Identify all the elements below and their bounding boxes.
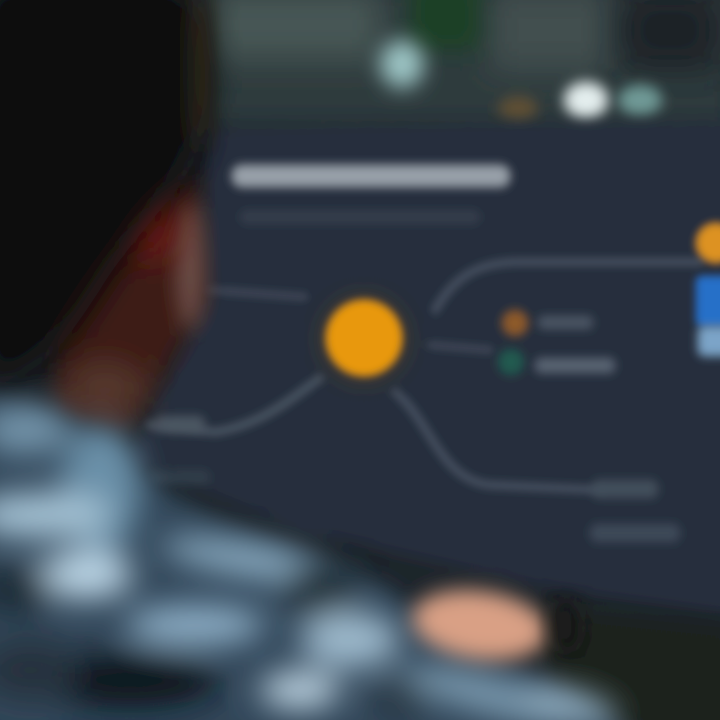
- person: neck and ear: [50, 170, 205, 430]
- heading: blurred screen title: [232, 165, 510, 224]
- person: patterned shirt: [0, 395, 640, 720]
- person: hand: [408, 582, 579, 668]
- icon: right edge orange and blue nodes: [696, 223, 720, 356]
- person: dark hair: [0, 0, 210, 385]
- panel: dark flowchart screen: [130, 122, 720, 615]
- icon: small orange and green nodes with labels: [498, 310, 615, 375]
- lower background below the screen: [0, 610, 720, 720]
- icon: central orange node: [316, 291, 412, 387]
- connector lines of the flowchart: [150, 262, 700, 490]
- lower right blurred labels: [150, 416, 680, 542]
